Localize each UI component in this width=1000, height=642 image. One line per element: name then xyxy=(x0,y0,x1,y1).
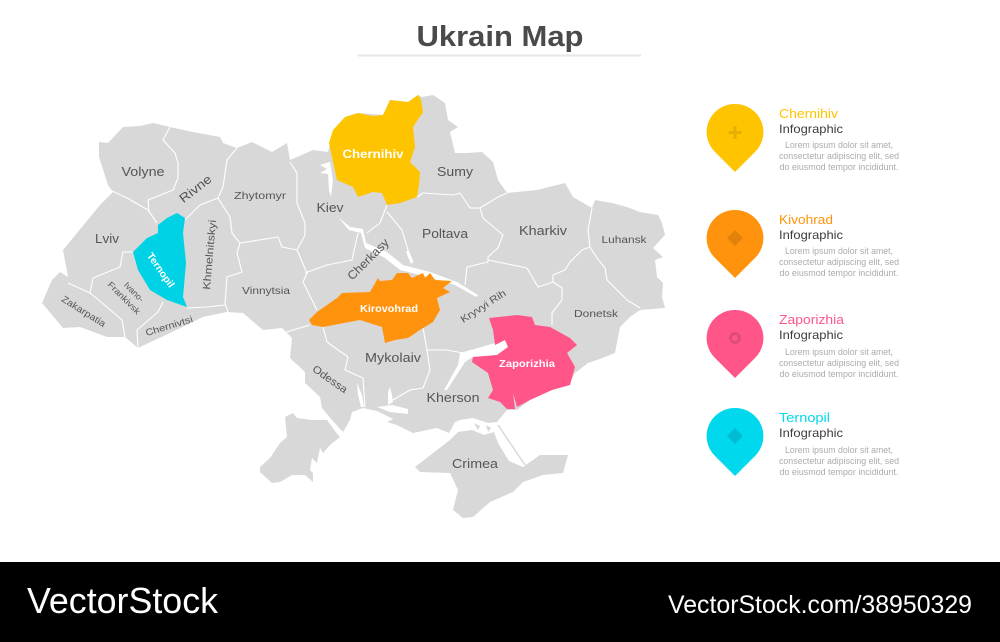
legend description: consectetur adipiscing elit, sed xyxy=(779,151,899,161)
map label: Ivano-Frankivsk: Ivano- xyxy=(122,280,146,304)
map: Arabat spit xyxy=(498,425,525,465)
legend description xyxy=(779,246,899,278)
map label: Lviv: Lviv xyxy=(95,232,120,246)
legend subheading: Infographic xyxy=(779,228,843,242)
legend item: Kivohrad xyxy=(707,210,899,278)
title underline xyxy=(358,54,641,56)
map label: Kiev: Kiev xyxy=(316,201,344,215)
map label: Rivne: Rivne xyxy=(177,172,214,206)
legend description: do eiusmod tempor incididunt. xyxy=(780,369,898,379)
map: rivers and reservoirs xyxy=(320,162,508,414)
region: Kirovohrad xyxy=(309,273,452,343)
map label: Crimea: Crimea xyxy=(452,457,498,471)
map label: Vinnytsia: Vinnytsia xyxy=(242,285,290,297)
legend item: Chernihiv xyxy=(707,104,899,172)
icon: orange pin with diamond xyxy=(707,210,763,278)
legend description: do eiusmod tempor incididunt. xyxy=(780,162,898,172)
legend heading: Zaporizhia xyxy=(779,312,845,327)
map label: Sumy: Sumy xyxy=(437,165,474,179)
legend description: do eiusmod tempor incididunt. xyxy=(780,467,898,477)
legend description xyxy=(779,445,899,477)
map label: Khmelnitskyi: Khmelnitskyi xyxy=(201,219,219,290)
map label: Kryvyi Rih: Kryvyi Rih xyxy=(459,288,508,326)
map label: Donetsk: Donetsk xyxy=(574,308,619,320)
map label: Chernihiv: Chernihiv xyxy=(342,149,404,161)
footer image id: VectorStock.com/38950329 xyxy=(668,591,972,619)
legend description: consectetur adipiscing elit, sed xyxy=(779,358,899,368)
map label: Kharkiv: Kharkiv xyxy=(519,224,568,238)
legend description: Lorem ipsum dolor sit amet, xyxy=(785,246,893,256)
map: Crimea xyxy=(415,430,568,518)
map label: Cherkasy: Cherkasy xyxy=(344,235,392,283)
map label: Chernivtsi: Chernivtsi xyxy=(144,314,194,339)
title: Ukrain Map xyxy=(416,21,584,53)
legend item: Zaporizhia xyxy=(707,310,899,379)
map label: Ternopil: Ternopil xyxy=(144,251,176,290)
icon: cyan pin with diamond xyxy=(707,408,763,476)
map label: Zhytomyr: Zhytomyr xyxy=(234,190,287,202)
legend item: Ternopil xyxy=(707,408,899,477)
map of Ukraine xyxy=(42,95,665,518)
legend subheading: Infographic xyxy=(779,328,843,342)
map label: Luhansk: Luhansk xyxy=(602,234,647,246)
map label: Volyne: Volyne xyxy=(122,165,165,179)
region: Ternopil xyxy=(133,213,187,307)
legend description: Lorem ipsum dolor sit amet, xyxy=(785,445,893,455)
map: Sivash islands xyxy=(474,423,491,432)
map: region borders xyxy=(68,127,640,407)
map label: Zaporizhia: Zaporizhia xyxy=(499,358,555,370)
legend description: consectetur adipiscing elit, sed xyxy=(779,257,899,267)
legend description xyxy=(779,347,899,379)
legend subheading: Infographic xyxy=(779,122,843,136)
map label: Kirovohrad: Kirovohrad xyxy=(360,303,418,315)
legend description xyxy=(779,140,899,172)
icon: pink pin with ring xyxy=(707,310,763,378)
legend description: do eiusmod tempor incididunt. xyxy=(780,268,898,278)
region: Chernihiv xyxy=(329,95,423,205)
legend subheading: Infographic xyxy=(779,426,843,440)
legend description: consectetur adipiscing elit, sed xyxy=(779,456,899,466)
legend description: Lorem ipsum dolor sit amet, xyxy=(785,347,893,357)
map label: Ivano-Frankivsk: Frankivsk xyxy=(106,279,143,317)
icon: yellow pin with plus xyxy=(707,104,763,172)
map: Budjak region of Odessa xyxy=(260,413,340,483)
legend heading: Kivohrad xyxy=(779,212,833,227)
map label: Zakarpatia: Zakarpatia xyxy=(59,294,108,330)
region: Zaporizhia xyxy=(472,315,577,409)
map: mainland base xyxy=(42,95,665,433)
footer bar xyxy=(0,562,1000,642)
map label: Odessa: Odessa xyxy=(310,363,350,396)
legend heading: Chernihiv xyxy=(779,106,839,121)
legend description: Lorem ipsum dolor sit amet, xyxy=(785,140,893,150)
map label: Kherson: Kherson xyxy=(426,391,480,405)
map label: Mykolaiv: Mykolaiv xyxy=(365,351,422,365)
legend heading: Ternopil xyxy=(779,410,830,425)
footer logo text: VectorStock xyxy=(27,580,219,621)
map label: Poltava: Poltava xyxy=(422,227,468,241)
